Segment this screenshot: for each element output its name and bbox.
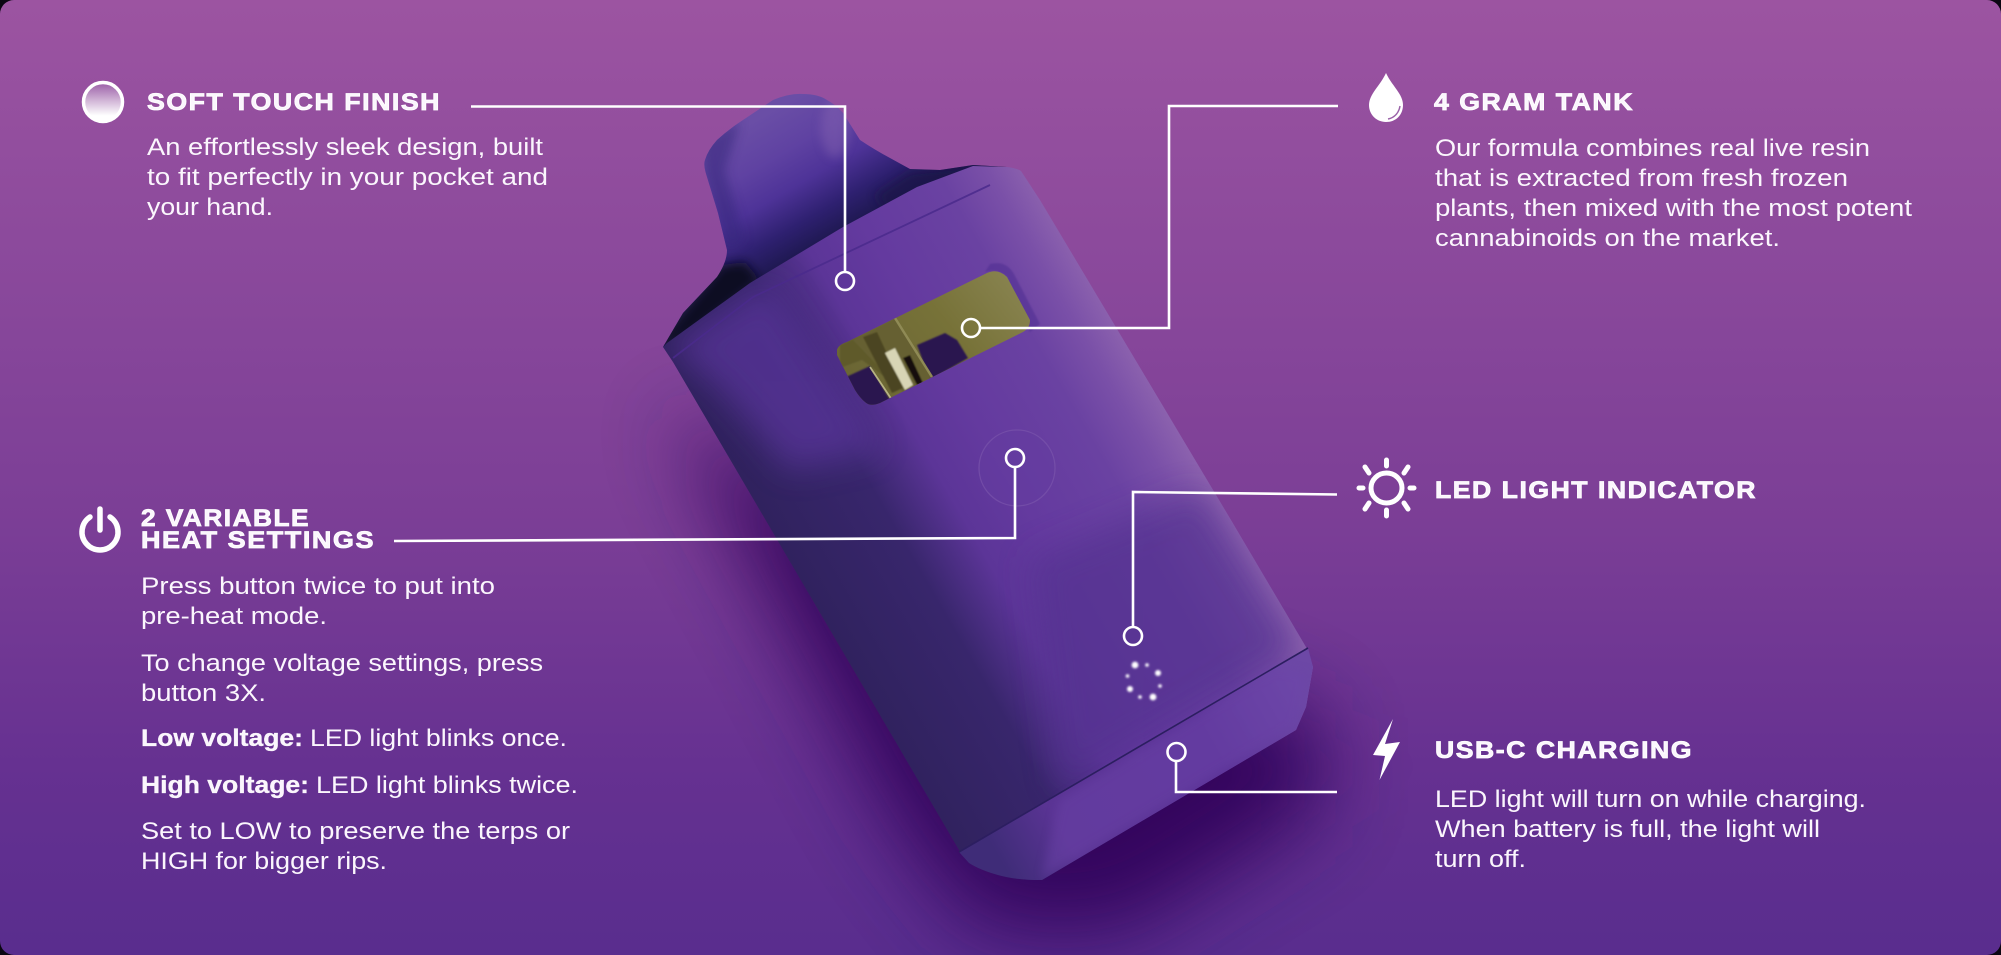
device top seam xyxy=(673,185,990,358)
icon: water drop xyxy=(1369,73,1403,122)
text: heat settings description: Low voltage: xyxy=(141,725,303,752)
heading: 4 gram tank: 4 GRAM TANK xyxy=(1434,89,1634,116)
text: heat settings description: High voltage: xyxy=(141,772,309,799)
text: soft touch description: An effortlessly sleek design, built xyxy=(147,134,543,161)
window bezel xyxy=(985,263,1040,332)
device drop shadow xyxy=(670,410,1320,935)
device illustration xyxy=(650,85,1330,890)
callout line: 4 gram tank xyxy=(962,106,1338,337)
device bottom cap xyxy=(959,648,1313,880)
heading: USB-C charging: USB-C CHARGING xyxy=(1435,737,1693,764)
text: heat settings description xyxy=(141,573,578,875)
tank window xyxy=(837,271,1030,405)
text: heat settings description: Press button twice to put into xyxy=(141,573,495,600)
text: USB-C charging description: LED light will turn on while charging. xyxy=(1435,786,1866,813)
LED ring xyxy=(1126,662,1162,700)
heading: heat settings: HEAT SETTINGS xyxy=(141,527,375,554)
text: 4 gram tank description: cannabinoids on the market. xyxy=(1435,225,1780,252)
power button xyxy=(979,430,1055,506)
text: heat settings description: button 3X. xyxy=(141,680,266,707)
heading: LED light indicator: LED LIGHT INDICATOR xyxy=(1435,477,1757,504)
text: heat settings description: HIGH for bigger rips. xyxy=(141,848,387,875)
callout line: heat settings xyxy=(394,449,1024,541)
text: heat settings description: LED light blinks twice. xyxy=(316,772,578,799)
text: soft touch description: to fit perfectly in your pocket and xyxy=(147,164,548,191)
icon: soft touch orb xyxy=(84,82,122,122)
heading: heat settings: 2 VARIABLE xyxy=(141,505,310,532)
text: heat settings description: LED light blinks once. xyxy=(310,725,567,752)
text: USB-C charging description: When battery is full, the light will xyxy=(1435,816,1820,843)
text: heat settings description: pre-heat mode. xyxy=(141,603,327,630)
text: soft touch description: your hand. xyxy=(147,194,273,221)
callout line: USB-C charging xyxy=(1168,743,1337,792)
bottom cap facet xyxy=(1046,727,1218,872)
body upper face shading xyxy=(668,280,880,470)
text: 4 gram tank description xyxy=(1435,135,1912,252)
icon: power xyxy=(82,509,118,550)
device mouthpiece xyxy=(663,94,1006,347)
text: 4 gram tank description: that is extracted from fresh frozen xyxy=(1435,165,1848,192)
text: USB-C charging description xyxy=(1435,786,1866,873)
text: heat settings description: Set to LOW to preserve the terps or xyxy=(141,818,570,845)
body lower face shading xyxy=(1046,486,1304,736)
callout line: LED indicator xyxy=(1124,492,1337,645)
text: 4 gram tank description: Our formula combines real live resin xyxy=(1435,135,1870,162)
heading: soft touch finish: SOFT TOUCH FINISH xyxy=(147,89,441,116)
text: soft touch description xyxy=(147,134,548,221)
device body xyxy=(663,166,1313,862)
icon: sun xyxy=(1359,460,1414,516)
text: heat settings description: To change voltage settings, press xyxy=(141,650,543,677)
device bottom seam xyxy=(959,648,1308,852)
icon: lightning bolt xyxy=(1373,719,1400,780)
text: 4 gram tank description: plants, then mixed with the most potent xyxy=(1435,195,1912,222)
callout line: soft touch finish xyxy=(471,106,854,290)
heading: heat settings xyxy=(141,505,375,554)
text: USB-C charging description: turn off. xyxy=(1435,846,1526,873)
